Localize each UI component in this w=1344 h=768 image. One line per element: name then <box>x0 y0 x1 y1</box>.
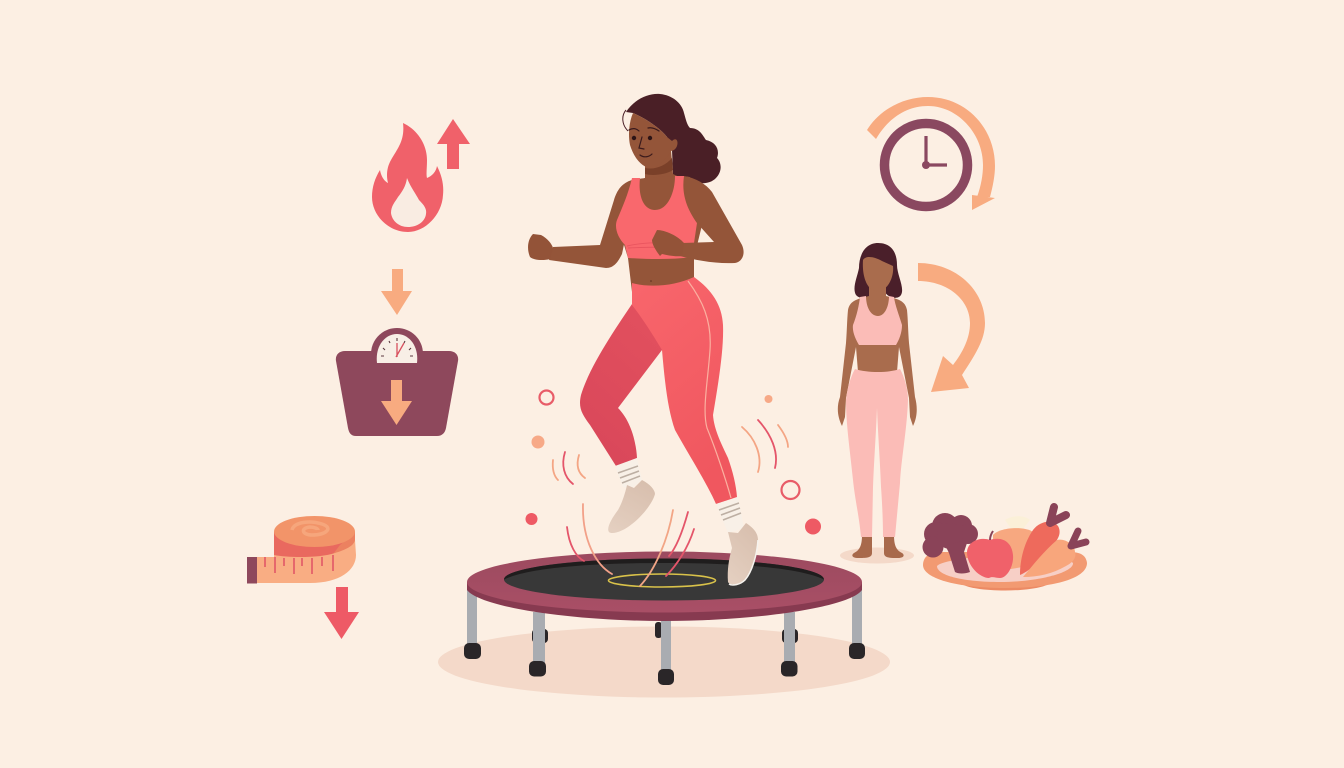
back fruit <box>993 516 1035 572</box>
plate inner <box>937 555 1073 582</box>
trampoline ground shadow <box>438 626 890 698</box>
orange down arrow <box>381 269 412 315</box>
main figure: woman jumping <box>528 94 758 585</box>
fire with up arrow icon <box>372 119 470 232</box>
legs and feet <box>464 590 865 685</box>
sock back <box>615 458 642 488</box>
feet <box>852 535 904 558</box>
side figure: slim woman standing <box>838 243 917 564</box>
sock front <box>716 497 744 533</box>
trampoline <box>464 552 865 685</box>
broccoli <box>922 513 978 574</box>
clock with cycle arrow icon <box>867 97 995 210</box>
dial face <box>377 334 417 363</box>
weighing scale icon <box>336 328 458 436</box>
neck <box>633 150 690 182</box>
clock hands <box>926 136 947 165</box>
sock stripes front <box>719 503 741 520</box>
scale arrow <box>381 380 412 425</box>
roll spiral <box>292 522 328 535</box>
jumping mat <box>504 558 824 600</box>
hair wisp <box>623 110 628 131</box>
back legs <box>532 622 798 643</box>
scale body <box>336 351 458 436</box>
leggings <box>846 369 908 537</box>
tape end tab <box>247 557 257 584</box>
curved down arrow <box>918 263 985 392</box>
red down arrow <box>324 587 359 639</box>
cycle arc <box>867 97 995 197</box>
tape strip <box>247 540 356 583</box>
front leg <box>632 277 737 504</box>
right fist <box>652 230 684 256</box>
shoe back <box>608 480 655 533</box>
roll top <box>274 516 355 547</box>
dial ticks and needle <box>381 338 413 357</box>
face <box>863 257 893 291</box>
scale dome <box>371 328 423 354</box>
plate foot <box>960 583 1050 590</box>
clock ring <box>884 124 968 206</box>
hair back <box>626 94 721 183</box>
left fist <box>528 234 553 260</box>
crop top band line <box>627 243 693 248</box>
right arm <box>680 176 744 263</box>
face <box>629 113 678 168</box>
roll side <box>274 532 355 558</box>
up arrow <box>437 119 470 169</box>
foot shadow <box>840 548 914 564</box>
inner flame <box>391 178 426 227</box>
body skin <box>838 285 917 426</box>
tape ticks <box>265 555 333 574</box>
pants seam <box>688 281 731 498</box>
navel <box>650 280 652 282</box>
torso skin <box>618 176 702 292</box>
left arm <box>549 180 632 268</box>
sock stripes back <box>618 466 640 483</box>
plate <box>923 552 1087 588</box>
carrot two <box>1023 531 1086 577</box>
shoe front <box>728 523 758 584</box>
back leg <box>580 304 670 466</box>
neck shadow <box>645 158 673 175</box>
facial features <box>629 128 659 157</box>
hair back <box>854 243 902 298</box>
frame rim <box>467 582 862 621</box>
healthy food plate <box>922 507 1087 590</box>
crop top <box>616 176 697 259</box>
carrot one <box>1020 507 1066 575</box>
shoe sole highlight <box>729 540 758 585</box>
arc arrow head <box>972 195 995 210</box>
crop top <box>853 296 902 345</box>
motion lines and dots <box>526 390 821 586</box>
yellow impact ring <box>608 574 716 587</box>
apple <box>967 531 1013 578</box>
flame <box>372 123 443 232</box>
measuring tape icon <box>247 516 359 639</box>
